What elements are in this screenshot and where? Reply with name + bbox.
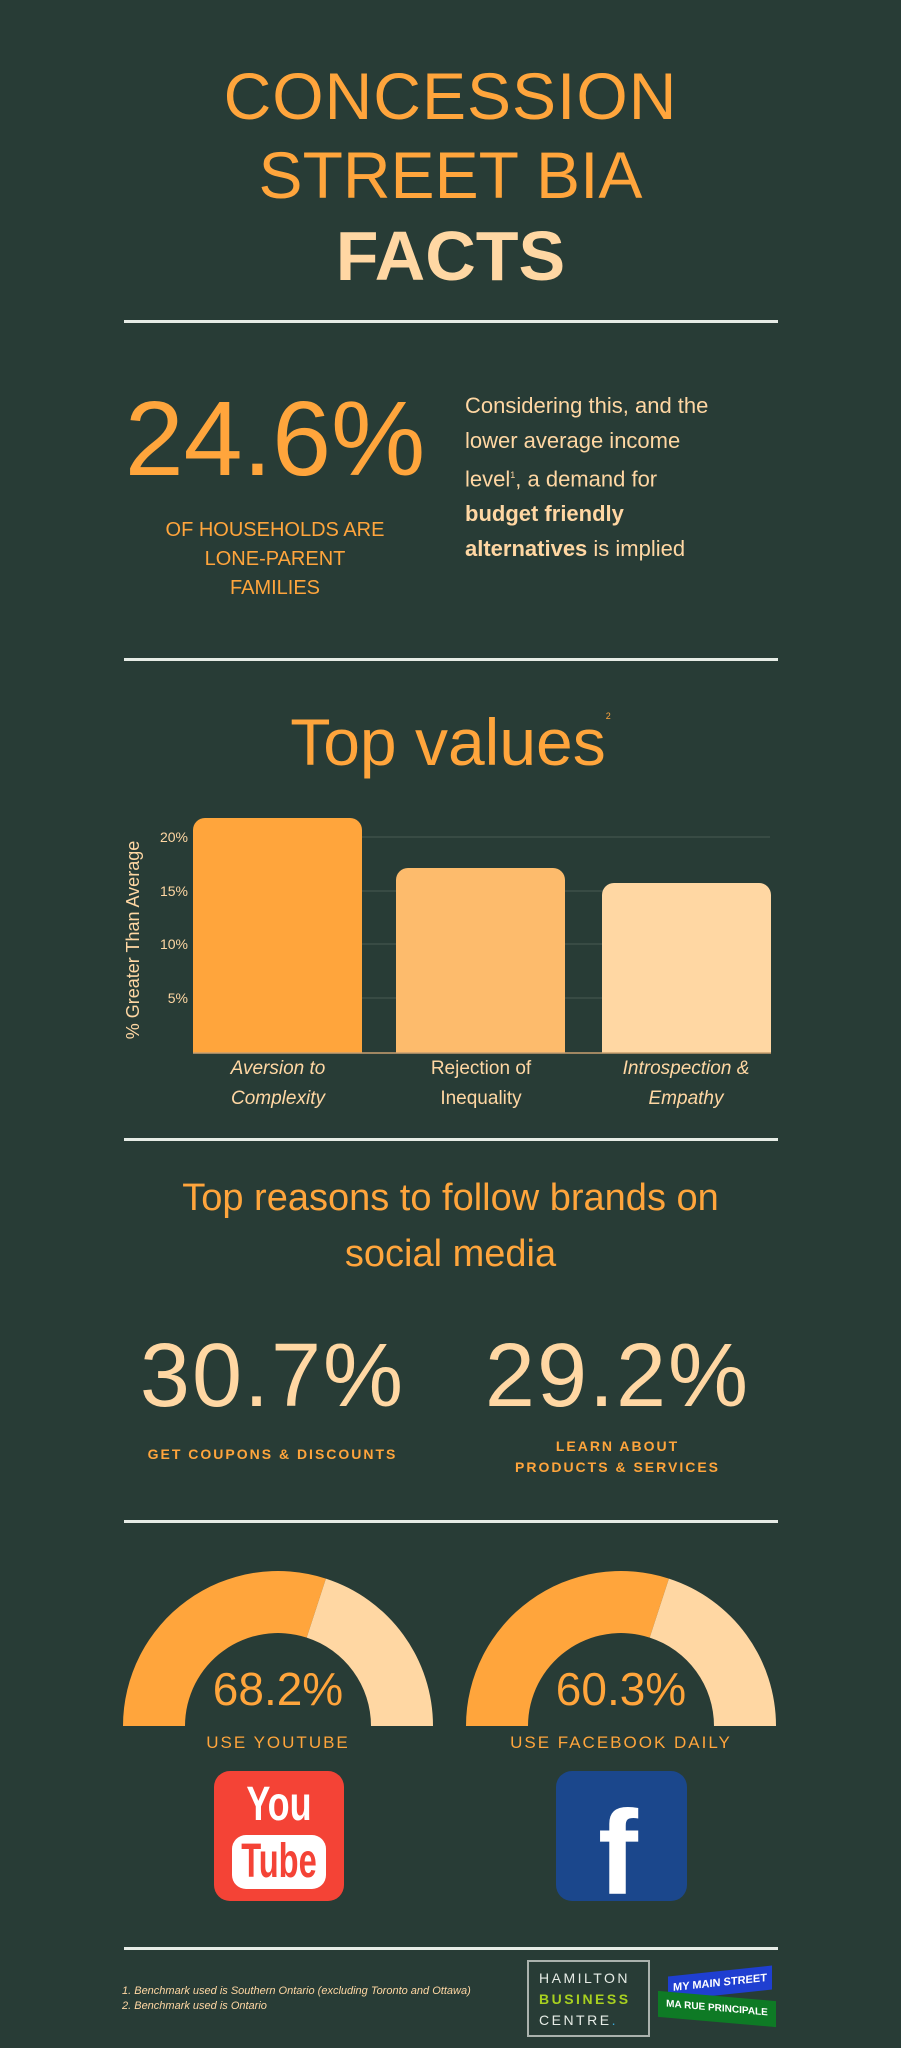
bar chart: Complexity [231,1088,326,1109]
logo: hamilton business centre: BUSINESS [539,1991,631,2007]
icon: facebook [556,1771,687,1901]
bar chart: 5% [168,990,188,1006]
footnotes: 1. Benchmark used is Southern Ontario (excluding Toronto and Ottawa) [122,1985,471,1997]
icon: youtube [214,1771,344,1901]
label: use facebook daily: USE FACEBOOK DAILY [510,1733,732,1752]
stat: lone-parent families: 24.6% [125,380,425,498]
bar chart: Introspection & [623,1058,749,1079]
gauge value: facebook: 60.3% [556,1663,686,1715]
stat: coupons: GET COUPONS & DISCOUNTS [148,1446,397,1462]
stat: lone-parent families: FAMILIES [230,577,320,599]
bar chart: Inequality [440,1088,522,1109]
stat: products [485,1326,750,1475]
logo: hamilton business centre [527,1960,650,2037]
bar chart [123,818,771,1109]
title: CONCESSION [224,59,677,133]
gauge: facebook [466,1571,776,1726]
logo: my main street [658,1966,776,2028]
footnotes: 2. Benchmark used is Ontario [122,2000,267,2012]
footnotes [122,1985,471,2012]
title: FACTS [336,217,565,295]
logo: my main street: MA RUE PRINCIPALE [666,1999,768,2018]
logo: hamilton business centre: CENTRE. [539,2012,618,2028]
bar chart: % Greater Than Average [123,841,143,1039]
stat: products: LEARN ABOUT [556,1438,679,1454]
bar chart: Rejection of [431,1058,532,1079]
heading: top reasons [182,1177,719,1275]
title [224,59,677,295]
stat: products: 29.2% [485,1326,750,1426]
stat: lone-parent families: OF HOUSEHOLDS ARE [166,519,384,541]
title: STREET BIA [259,138,642,212]
gauge value: youtube: 68.2% [213,1663,343,1715]
icon: youtube: Tube [241,1835,317,1888]
text block: budget friendly: Considering this, and the lower average income level1, a demand for budget friendly alternatives is implied [465,393,708,561]
icon: youtube: You [246,1778,312,1831]
gauge: youtube [123,1571,433,1726]
heading: top reasons: social media [345,1233,556,1275]
bar chart: 15% [160,883,188,899]
heading: top values: Top values2 [290,705,611,779]
bar chart: Aversion to [230,1058,325,1079]
stat: coupons: 30.7% [140,1326,405,1426]
heading: top reasons: Top reasons to follow brands on [182,1177,719,1219]
stat: lone-parent families: LONE-PARENT [205,548,345,570]
logo: my main street: MY MAIN STREET [673,1972,767,1994]
stat: lone-parent families [125,380,425,599]
logo: hamilton business centre: HAMILTON [539,1970,630,1986]
bar chart: 20% [160,829,188,845]
bar chart: Empathy [649,1088,725,1109]
label: use youtube: USE YOUTUBE [206,1733,350,1752]
bar chart: 10% [160,936,188,952]
stat: products: PRODUCTS & SERVICES [515,1459,720,1475]
